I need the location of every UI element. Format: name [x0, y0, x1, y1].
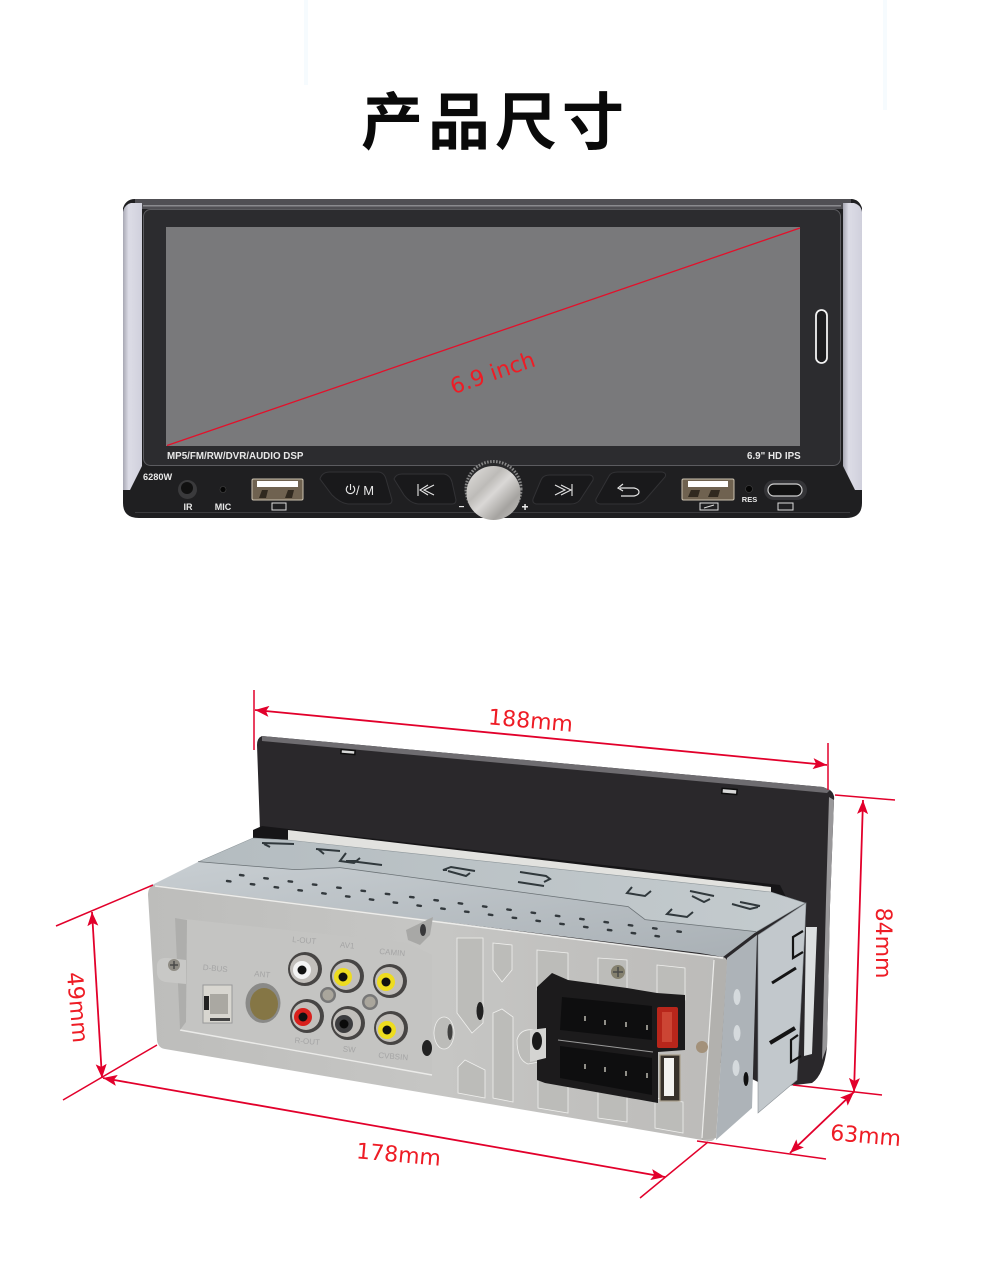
embossed port labels: R-OUT — [294, 1036, 320, 1047]
screen size label: 6.9 inch — [447, 348, 539, 400]
socket upper — [560, 997, 652, 1040]
embossed port labels: AV1 — [340, 940, 355, 951]
top highlight — [155, 886, 723, 958]
display area — [166, 227, 800, 446]
connector recess panel — [175, 918, 432, 1075]
stamped slots — [434, 938, 513, 1102]
home button pill — [816, 310, 827, 363]
next track button — [533, 475, 593, 504]
right USB port — [682, 479, 734, 510]
side plate — [716, 935, 757, 1140]
title: 产品尺寸 — [361, 89, 629, 158]
previous track button — [394, 474, 456, 504]
dimension: height 49mm — [56, 885, 157, 1100]
yellow RCA CVBS — [374, 1011, 408, 1045]
top cover embossed tabs — [262, 843, 760, 917]
IR sensor — [178, 480, 197, 512]
white RCA — [288, 952, 322, 986]
bracket slots — [770, 931, 803, 1062]
red fuse — [657, 1007, 678, 1048]
pins — [585, 1016, 647, 1078]
IR sensor: IR — [184, 502, 193, 512]
side bracket — [758, 903, 806, 1113]
volume knob — [464, 461, 522, 520]
rear USB port — [660, 1055, 680, 1101]
bezel highlight — [143, 205, 841, 206]
back of front panel — [257, 736, 834, 1088]
dimension: height 84mm — [793, 795, 895, 1095]
right silver side panel — [843, 203, 862, 490]
embossed port labels: D-BUS — [202, 963, 228, 974]
rear view of car stereo — [148, 736, 834, 1141]
dimension: width 188mm: 188mm — [487, 705, 574, 738]
embossed port labels: L-OUT — [292, 935, 317, 946]
lower edge line — [135, 512, 850, 513]
model text: 6280W — [143, 472, 172, 482]
embossed port labels: ANT — [254, 969, 271, 980]
screen bezel — [144, 210, 840, 466]
left silver side panel — [123, 203, 142, 490]
ISO wiring harness connector — [530, 973, 685, 1103]
white strip — [288, 830, 771, 896]
USB-C port — [764, 480, 807, 510]
recess shadow — [175, 918, 187, 1030]
left USB port — [252, 479, 303, 510]
bracket strip — [804, 927, 817, 1056]
connector cutouts — [517, 950, 685, 1133]
dimension: length 178mm — [103, 1078, 708, 1198]
device body — [123, 199, 862, 518]
ANT socket — [246, 983, 280, 1023]
faint background streaks — [304, 0, 887, 110]
clip slots — [341, 749, 737, 795]
panel edge highlight — [262, 736, 830, 793]
RCA sockets — [288, 952, 408, 1045]
top cover — [198, 838, 805, 932]
yellow RCA CAM — [373, 964, 407, 998]
divider line — [558, 1040, 653, 1052]
front metal face — [148, 885, 727, 1141]
reset hole: RES — [742, 495, 757, 504]
top vented face — [148, 862, 756, 957]
dimension: height 84mm: 84mm — [870, 908, 895, 978]
microphone: MIC — [215, 502, 232, 512]
power mode button — [320, 472, 392, 504]
power mode button: / M — [356, 483, 374, 498]
embossed port labels: CAMIN — [379, 947, 406, 958]
embossed port labels: CVBSIN — [378, 1051, 409, 1062]
dimension: depth 63mm — [697, 1092, 902, 1159]
microphone — [215, 486, 232, 512]
reset hole — [742, 486, 757, 504]
dimension: length 178mm: 178mm — [355, 1139, 442, 1172]
dimension: height 49mm: 49mm — [61, 971, 92, 1044]
left screw — [157, 958, 186, 984]
dimension: depth 63mm: 63mm — [829, 1121, 902, 1152]
RCA screws — [320, 987, 378, 1010]
recess bottom edge — [180, 1030, 432, 1075]
back button — [596, 472, 666, 504]
D-BUS connector — [203, 985, 232, 1023]
top cover bends — [198, 862, 756, 932]
rear mounting bar — [253, 826, 790, 905]
side plate holes — [732, 989, 748, 1086]
yellow RCA AV1 — [330, 959, 364, 993]
dimension: width 188mm — [254, 690, 828, 790]
embossed port labels: SW — [342, 1044, 356, 1055]
feature text: MP5/FM/RW/DVR/AUDIO DSP — [167, 451, 304, 462]
right edge highlight — [702, 960, 714, 1138]
slot holes — [422, 1002, 484, 1056]
harness screws — [611, 965, 708, 1053]
black RCA — [331, 1006, 365, 1040]
screen spec text: 6.9" HD IPS — [747, 451, 801, 462]
embossed port labels — [202, 935, 409, 1062]
recess notch — [406, 917, 433, 945]
vent holes rows — [227, 875, 690, 939]
socket lower — [560, 1046, 652, 1095]
screen diagonal — [167, 228, 800, 446]
top bezel strip — [135, 199, 851, 209]
front view of car stereo — [123, 199, 862, 520]
volume minus plus — [459, 504, 528, 510]
right bevel shade — [702, 958, 727, 1140]
latch — [530, 1028, 546, 1062]
red RCA — [290, 999, 324, 1033]
